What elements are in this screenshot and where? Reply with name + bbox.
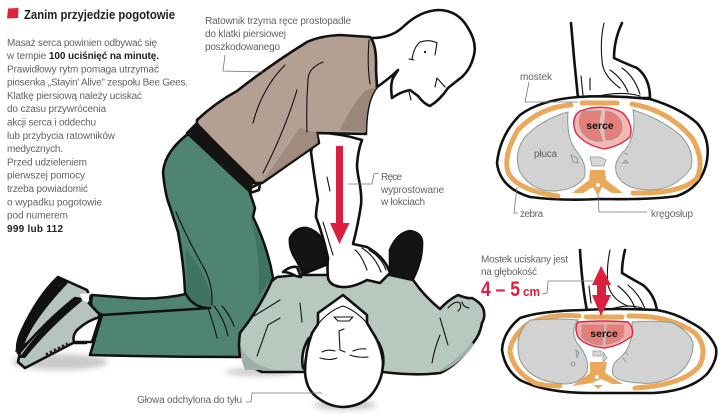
diagram: chest cross-section relaxed: żebra [520, 209, 543, 220]
shadow under figures [12, 354, 377, 410]
lungs [517, 112, 585, 191]
label: arm position: Ratownik trzyma ręce prostopadle [205, 16, 351, 27]
illustration: rescuer arms [283, 133, 390, 287]
ribs [510, 315, 579, 386]
ribs [507, 105, 571, 196]
text block: instructions: pod numerem [7, 211, 68, 222]
heart [576, 321, 632, 348]
text block: instructions: Przed udzieleniem [7, 157, 87, 168]
label: straight elbows: Ręce [381, 172, 402, 183]
text block: instructions [6, 38, 188, 235]
icon: red square [7, 8, 18, 18]
arms and hand [580, 250, 657, 311]
label: arm position: do klatki piersiowej [205, 29, 286, 40]
illustration: victim head [302, 295, 383, 407]
thigh and near lower leg [90, 131, 273, 357]
diagram: chest cross-section compressed: Mostek uciskany jest [481, 254, 568, 266]
diagram: chest cross-section relaxed [497, 23, 708, 220]
title: Zanim przyjedzie pogotowie [24, 8, 175, 22]
text block: instructions: lub przybycia ratowników [7, 131, 116, 142]
diagram: chest cross-section relaxed: kręgosłup [651, 209, 693, 220]
label: straight elbows [348, 172, 444, 208]
labels: serce [590, 328, 618, 340]
text block: instructions: piosenka „Stayin' Alive” zespołu Bee Gees. [7, 78, 188, 89]
spine [572, 362, 623, 386]
belt [186, 123, 255, 191]
illustration: rescuer head [372, 10, 475, 106]
label: head tilted: Głowa odchylona do tyłu [137, 395, 242, 406]
shoe lace holes [46, 344, 68, 355]
illustration: rescuer shoes [15, 277, 100, 368]
label: straight elbows: wyprostowane [380, 185, 444, 196]
text block: instructions: Klatkę piersiową należy uciskać [7, 91, 142, 102]
heart [574, 107, 631, 149]
illustration: rescuer legs [90, 131, 273, 357]
diagram: chest cross-section compressed: na głębokość [481, 267, 537, 278]
spine [572, 170, 623, 196]
text block: instructions: Masaż serca powinien odbywać się [7, 38, 157, 49]
label: arm position: poszkodowanego [205, 42, 280, 53]
label: arm position [205, 16, 351, 72]
illustration: victim knees [290, 228, 422, 281]
text block: instructions: pierwszej pomocy [7, 171, 85, 182]
labels: serce [586, 120, 614, 132]
text block: instructions: do czasu przywrócenia [7, 104, 106, 115]
text block: instructions: Prawidłowy rytm pomaga utrzymać [7, 64, 159, 75]
illustration: rescuer shirt [186, 35, 377, 193]
body outline [497, 96, 708, 200]
arms and hand [571, 23, 650, 98]
text block: instructions: trzeba powiadomić [7, 184, 88, 195]
diagram: chest cross-section relaxed: płuca [534, 149, 557, 160]
diagram: chest cross-section relaxed: mostek [520, 72, 553, 83]
label: head tilted [137, 393, 322, 406]
lungs [518, 319, 588, 384]
text block: instructions: medycznych. [7, 144, 63, 155]
text block: instructions: akcji serca i oddechu [7, 118, 96, 128]
arrow: main compression [330, 146, 350, 244]
diagram: chest cross-section compressed: 4 – 5 [481, 278, 520, 301]
heading [7, 8, 175, 22]
diagram: chest cross-section compressed [481, 250, 716, 393]
text block: instructions: w tempie 100 uciśnięć na minutę. [6, 51, 159, 62]
diagram: chest cross-section compressed: cm [523, 284, 540, 299]
arrow: compression depth [592, 266, 611, 316]
text block: instructions: o wypadku pogotowie [7, 197, 102, 208]
lower leg far [90, 294, 215, 315]
label: straight elbows: w łokciach [380, 197, 425, 208]
text block: instructions: 999 lub 112 [7, 224, 63, 235]
illustration: victim torso [238, 275, 484, 374]
body outline [502, 309, 716, 393]
